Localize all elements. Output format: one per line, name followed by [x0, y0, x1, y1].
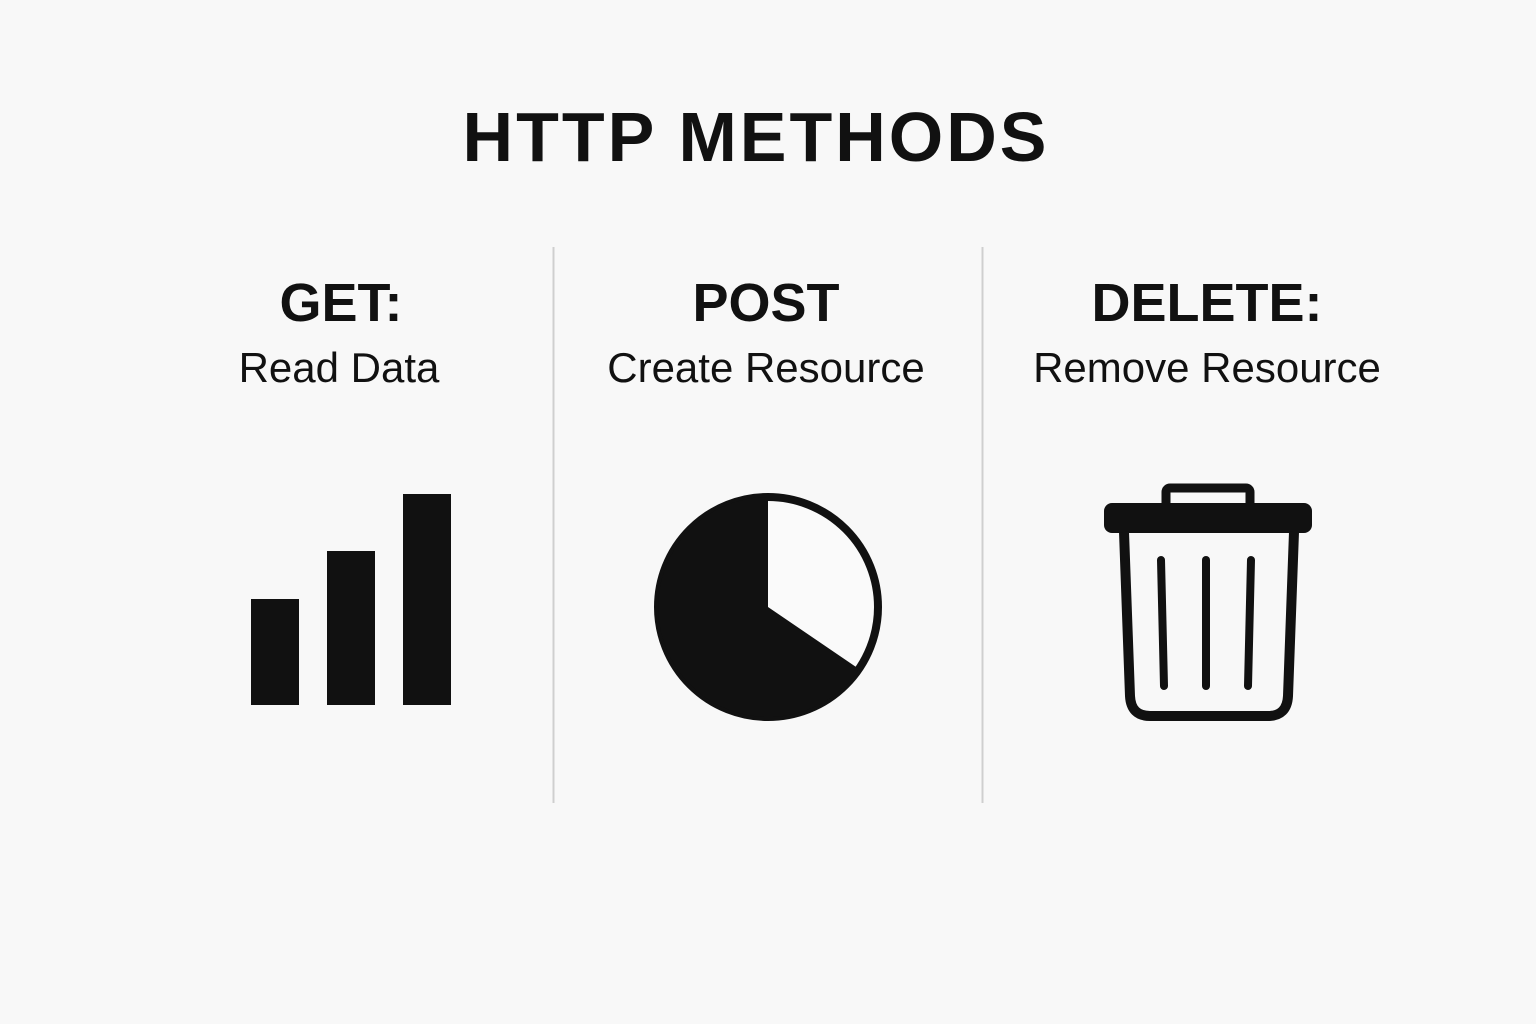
heading: POST: POST: [692, 273, 840, 333]
panel: DELETE: [1033, 273, 1381, 391]
subheading: Read Data: Read Data: [239, 344, 439, 391]
icon: trash can: [1104, 484, 1312, 721]
heading: GET: GET:: [279, 273, 402, 333]
heading: DELETE: DELETE:: [1091, 273, 1322, 333]
subheading: Remove Resource: Remove Resource: [1033, 344, 1381, 391]
panel: GET: [239, 273, 440, 391]
title: HTTP METHODS: [463, 98, 1049, 176]
icon: bar chart: [251, 494, 451, 705]
icon: pie chart: [654, 493, 882, 721]
panel: POST: [607, 273, 925, 391]
subheading: Create Resource: Create Resource: [607, 344, 925, 391]
